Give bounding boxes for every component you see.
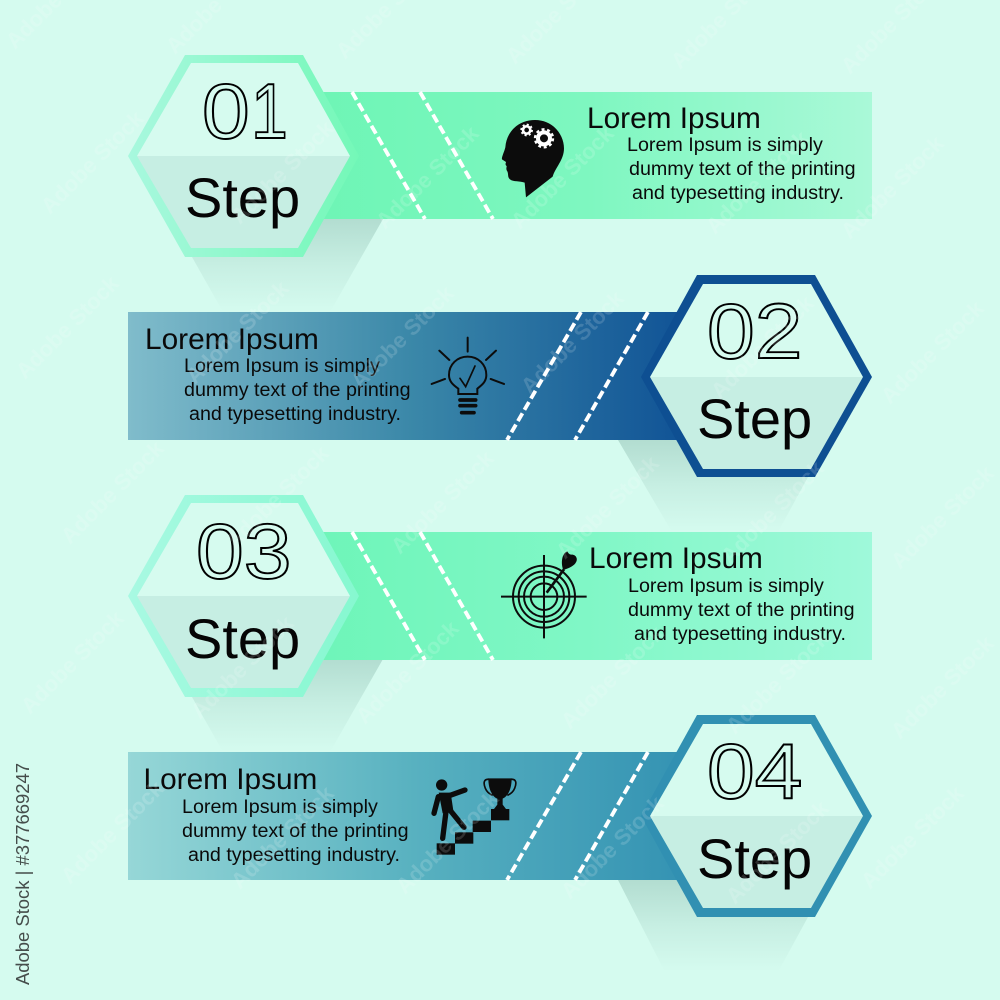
text: Adobe Stock xyxy=(886,460,999,574)
text block: step 2: Lorem Ipsum is simply xyxy=(184,355,380,377)
hexagon: step 2 xyxy=(641,275,872,477)
text: Adobe Stock xyxy=(16,605,129,719)
band: step 1 xyxy=(300,92,872,219)
text: Adobe Stock xyxy=(516,285,629,399)
label: Step: Step xyxy=(185,607,300,670)
text block: step 1: and typesetting industry. xyxy=(632,182,844,204)
text: Adobe Stock xyxy=(856,780,969,894)
shadow: step 4 xyxy=(618,880,815,972)
text block: step 4: and typesetting industry. xyxy=(188,844,400,866)
text block: step 3: dummy text of the printing xyxy=(628,599,855,621)
text block: step 1 xyxy=(627,134,856,204)
panel: step 4 xyxy=(128,715,872,972)
heading: step 3: Lorem Ipsum xyxy=(589,542,763,575)
text: Adobe Stock xyxy=(371,120,484,234)
text: Adobe Stock xyxy=(701,125,814,239)
text: Adobe Stock xyxy=(876,295,989,409)
heading: step 4: Lorem Ipsum xyxy=(144,763,317,796)
text: Adobe Stock xyxy=(551,450,664,564)
hexagon: step 3 xyxy=(128,495,359,697)
label: Step: Step xyxy=(697,387,812,450)
shadow: step 3 xyxy=(185,659,383,752)
text block: step 2: dummy text of the printing xyxy=(184,379,411,401)
panel: step 2 xyxy=(128,275,872,532)
dashed dividers: step 3 xyxy=(352,532,493,660)
dashed dividers: step 1 xyxy=(352,92,493,219)
text: Adobe Stock xyxy=(226,115,339,229)
text block: step 4 xyxy=(182,796,409,866)
icon: light bulb with check xyxy=(432,338,504,413)
number: 01 xyxy=(202,68,288,155)
text: Adobe Stock xyxy=(721,625,834,739)
text: Adobe Stock xyxy=(11,270,124,384)
shadow: step 2 xyxy=(618,440,815,532)
text: Adobe Stock xyxy=(836,130,949,244)
shadow: step 1 xyxy=(185,219,383,312)
text block: step 2: and typesetting industry. xyxy=(189,403,401,425)
text block: step 3: and typesetting industry. xyxy=(634,623,846,645)
icon: head with gears xyxy=(502,120,564,197)
text: Adobe Stock xyxy=(886,630,999,744)
hexagon: step 1 xyxy=(128,55,359,257)
text block: step 2 xyxy=(184,355,411,425)
number: 04: 04 xyxy=(707,729,802,815)
text: Adobe Stock xyxy=(386,445,499,559)
text: Adobe Stock xyxy=(221,440,334,554)
text: Adobe Stock xyxy=(391,785,504,899)
panel: step 1 xyxy=(128,55,872,312)
text: Adobe Stock xyxy=(186,610,299,724)
text: Adobe Stock xyxy=(56,435,169,549)
panel: step 3 xyxy=(128,495,872,752)
text block: step 4: dummy text of the printing xyxy=(182,820,409,842)
text: Adobe Stock xyxy=(226,780,339,894)
icon: target with dart xyxy=(501,551,587,638)
text: Adobe Stock xyxy=(346,280,459,394)
text: Adobe Stock xyxy=(506,120,619,234)
text: Adobe Stock xyxy=(706,290,819,404)
text: Adobe Stock xyxy=(556,620,669,734)
stock id side text: Adobe Stock | #377669247 xyxy=(13,763,33,985)
dashed dividers: step 2 xyxy=(507,312,648,440)
text: Adobe Stock xyxy=(351,615,464,729)
text: Adobe Stock xyxy=(721,795,834,909)
label: Step: Step xyxy=(185,166,300,229)
number: 01: 0 xyxy=(202,69,250,155)
text: Adobe Stock xyxy=(36,105,149,219)
text: Adobe Stock xyxy=(716,455,829,569)
text: Adobe Stock xyxy=(181,275,294,389)
number: 01: 1 xyxy=(251,68,288,155)
dashed dividers: step 4 xyxy=(507,752,648,880)
text block: step 1: dummy text of the printing xyxy=(629,158,856,180)
heading: step 1: Lorem Ipsum xyxy=(587,102,761,135)
text: Adobe Stock xyxy=(56,775,169,889)
text block: step 3 xyxy=(628,575,855,645)
number: 03: 03 xyxy=(196,509,291,595)
text block: step 1: Lorem Ipsum is simply xyxy=(627,134,823,156)
icon: climbing stairs to trophy xyxy=(434,778,516,855)
text block: step 4: Lorem Ipsum is simply xyxy=(182,796,378,818)
text: Adobe Stock xyxy=(556,790,669,904)
number: 02: 02 xyxy=(707,289,802,375)
hexagon: step 4 xyxy=(641,715,872,917)
text block: step 3: Lorem Ipsum is simply xyxy=(628,575,824,597)
band: step 2 xyxy=(128,312,700,440)
band: step 4 xyxy=(128,752,700,880)
label: Step: Step xyxy=(697,827,812,890)
band: step 3 xyxy=(300,532,872,660)
heading: step 2: Lorem Ipsum xyxy=(145,323,319,356)
